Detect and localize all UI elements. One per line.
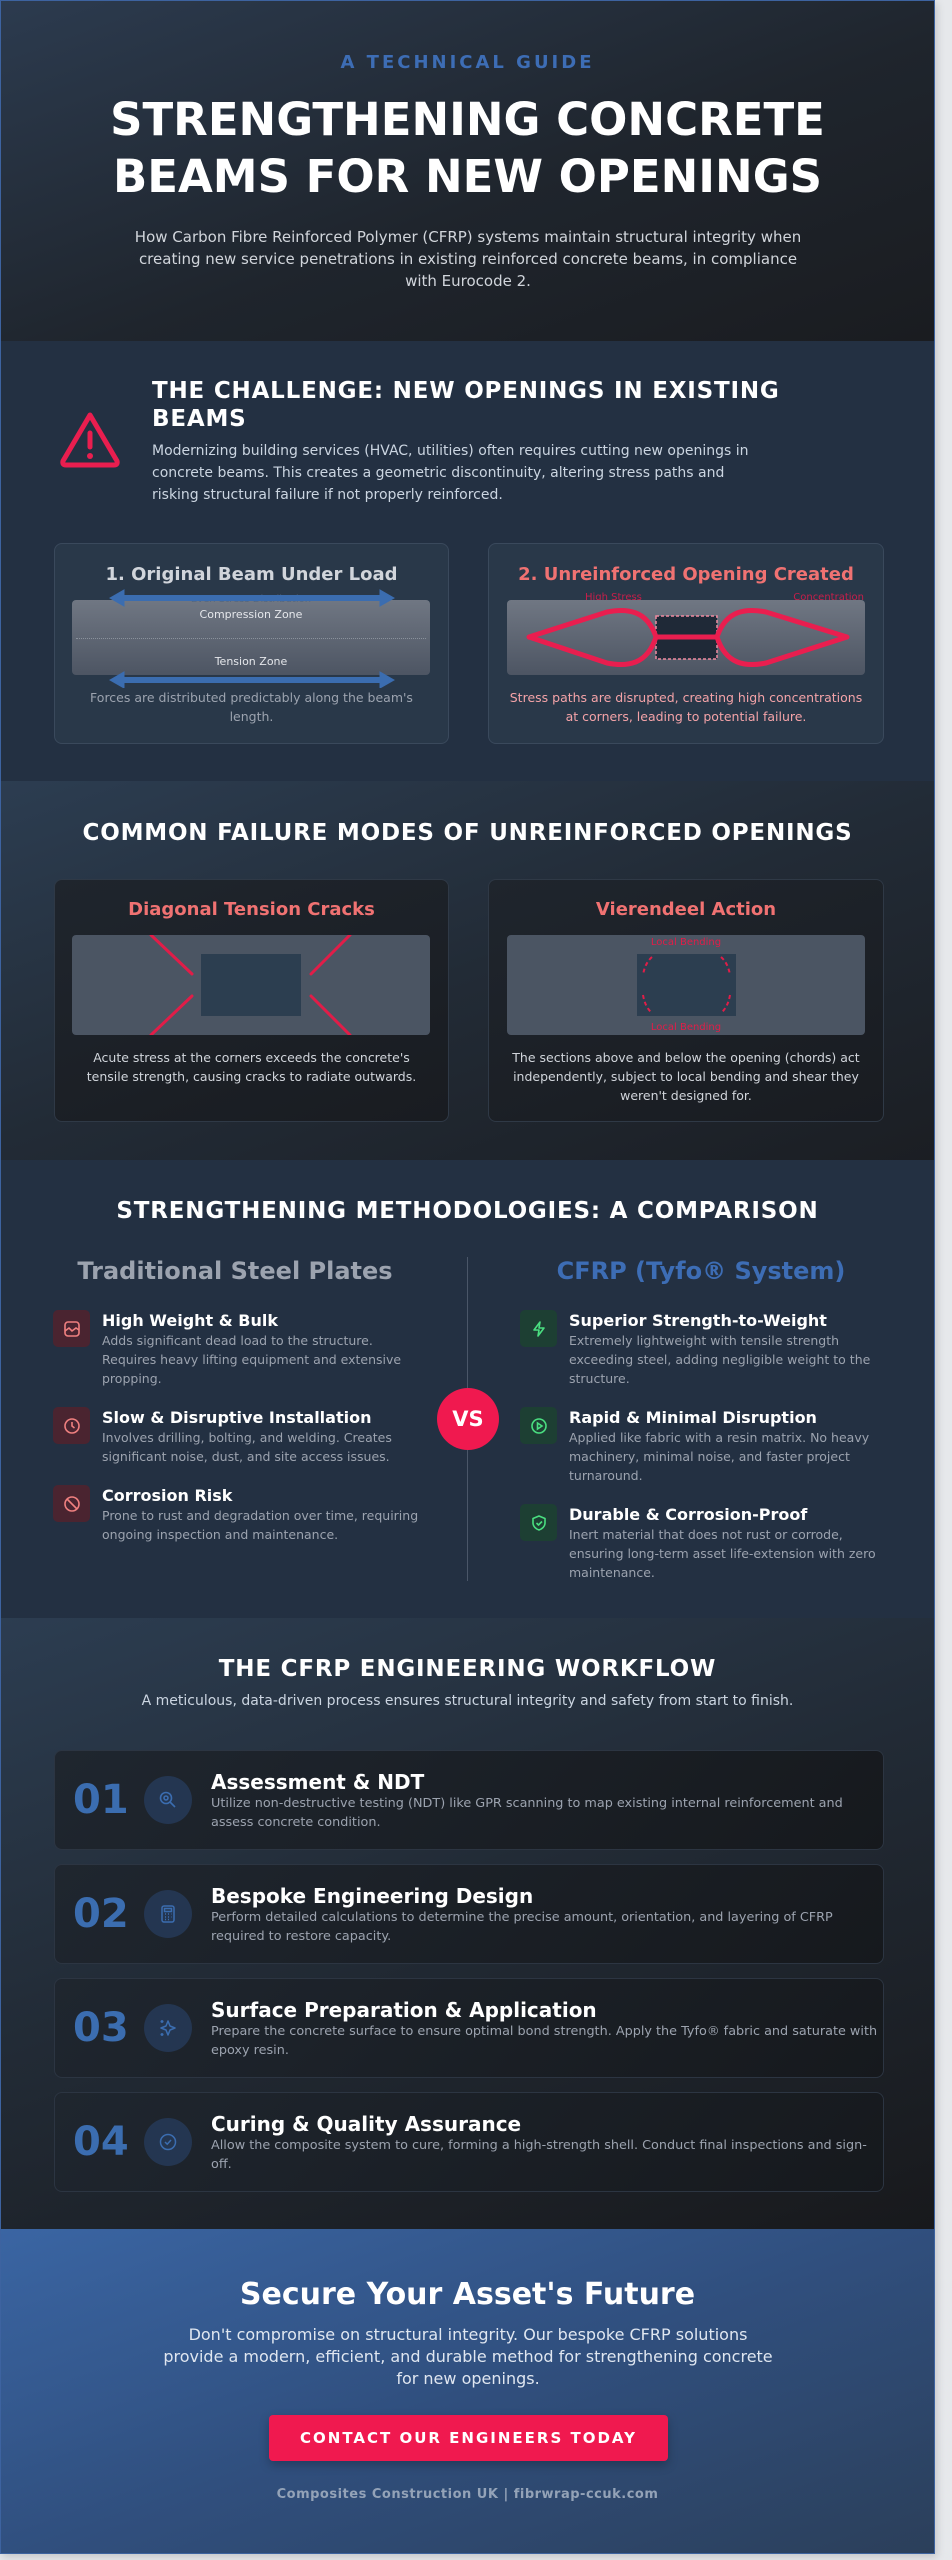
item: corrosion risk: Corrosion Risk bbox=[102, 1486, 232, 1505]
workflow subtitle: A meticulous, data-driven process ensures structural integrity and safety from start to finish. bbox=[142, 1693, 793, 1709]
item: strength to weight bbox=[520, 1310, 870, 1386]
caption: Stress paths are disrupted, creating high concentrations at corners, leading to potential failure. bbox=[510, 690, 862, 724]
tagline: A TECHNICAL GUIDE bbox=[340, 52, 594, 73]
vierendeel diagram: Local Bending bbox=[651, 1022, 721, 1033]
step 01: Utilize non-destructive testing (NDT) like GPR scanning to map existing internal reinforcement and bbox=[211, 1796, 843, 1811]
step 01 bbox=[54, 1750, 884, 1850]
step 04: off. bbox=[211, 2157, 232, 2172]
card: diagonal tension cracks bbox=[54, 879, 449, 1122]
step 04: Allow the composite system to cure, forming a high-strength shell. Conduct final inspections and sign- bbox=[211, 2138, 867, 2153]
item: rapid: Rapid & Minimal Disruption bbox=[569, 1408, 817, 1427]
panel: the challenge bbox=[1, 341, 934, 781]
step 03: Surface Preparation & Application bbox=[211, 1998, 597, 2022]
column title: cfrp: CFRP (Tyfo® System) bbox=[557, 1257, 845, 1285]
beam diagram bbox=[72, 589, 430, 688]
subtitle bbox=[135, 228, 801, 290]
column title: steel: Traditional Steel Plates bbox=[77, 1257, 393, 1285]
icon: bolt bbox=[520, 1310, 557, 1347]
item: strength to weight: Superior Strength-to-Weight bbox=[569, 1311, 827, 1330]
challenge heading: THE CHALLENGE: NEW OPENINGS IN EXISTING BEAMS bbox=[152, 378, 780, 432]
step 04: 04 bbox=[73, 2119, 129, 2165]
card title: 1. Original Beam Under Load bbox=[105, 564, 398, 585]
item: durable: Durable & Corrosion-Proof bbox=[569, 1505, 807, 1524]
icon: vs badge bbox=[437, 1388, 499, 1450]
item: high weight bbox=[53, 1310, 401, 1386]
card: unreinforced opening: Concentration bbox=[793, 592, 864, 603]
icon: weight bbox=[53, 1310, 90, 1347]
icon: ban bbox=[53, 1485, 90, 1522]
step 02: 02 bbox=[73, 1891, 129, 1937]
main title bbox=[110, 93, 825, 203]
workflow heading: THE CFRP ENGINEERING WORKFLOW bbox=[219, 1656, 716, 1682]
item: high weight: High Weight & Bulk bbox=[102, 1311, 278, 1330]
item: durable: Inert material that does not rust or corrode, ensuring long-term asset life-extension with zero maintenance. bbox=[569, 1527, 876, 1580]
item: corrosion risk: Prone to rust and degradation over time, requiring ongoing inspection and maintenance. bbox=[102, 1508, 418, 1542]
step 04: Curing & Quality Assurance bbox=[211, 2112, 521, 2136]
item: strength to weight: Extremely lightweight with tensile strength exceeding steel, adding negligible weight to the structure. bbox=[569, 1333, 870, 1386]
icon: sparkle bbox=[144, 2004, 192, 2052]
cta text: Don't compromise on structural integrity. Our bespoke CFRP solutions provide a modern, efficient, and durable method for strengthening concrete for new openings. bbox=[163, 2325, 773, 2388]
beam with opening diagram bbox=[507, 600, 865, 675]
step 04 bbox=[54, 2092, 884, 2192]
subtitle: How Carbon Fibre Reinforced Polymer (CFRP) systems maintain structural integrity when bbox=[135, 228, 801, 246]
panel: comparison bbox=[1, 1160, 934, 1618]
card title: 2. Unreinforced Opening Created bbox=[518, 564, 854, 585]
card: vierendeel action bbox=[488, 879, 884, 1122]
crack diagram bbox=[72, 935, 430, 1035]
icon: clock bbox=[53, 1407, 90, 1444]
step 02 bbox=[54, 1864, 884, 1964]
subtitle: creating new service penetrations in existing reinforced concrete beams, in compliance bbox=[139, 250, 797, 268]
item: corrosion risk bbox=[53, 1485, 418, 1542]
item: high weight: Adds significant dead load to the structure. Requires heavy lifting equipment and extensive propping. bbox=[102, 1333, 401, 1386]
step 02: Bespoke Engineering Design bbox=[211, 1884, 533, 1908]
card: original beam bbox=[54, 543, 449, 744]
step 03 bbox=[54, 1978, 884, 2078]
step 03: Prepare the concrete surface to ensure optimal bond strength. Apply the Tyfo® fabric and saturate with bbox=[211, 2024, 877, 2039]
cta button: CONTACT OUR ENGINEERS TODAY bbox=[300, 2429, 637, 2447]
icon: shield bbox=[520, 1504, 557, 1541]
icon: search bbox=[144, 1776, 192, 1824]
caption: Forces are distributed predictably along the beam's length. bbox=[90, 690, 413, 724]
icon: play bbox=[520, 1407, 557, 1444]
comparison heading: STRENGTHENING METHODOLOGIES: A COMPARISON bbox=[116, 1198, 819, 1224]
icon: check circle bbox=[144, 2118, 192, 2166]
panel: workflow bbox=[1, 1618, 934, 2229]
step 01: assess concrete condition. bbox=[211, 1815, 381, 1830]
step 03: 03 bbox=[73, 2005, 129, 2051]
icon: calculator bbox=[144, 1890, 192, 1938]
beam diagram: Even Stress Distribution bbox=[191, 594, 311, 605]
beam diagram: Tension Zone bbox=[215, 655, 287, 668]
step 01: Assessment & NDT bbox=[211, 1770, 424, 1794]
challenge text: Modernizing building services (HVAC, utilities) often requires cutting new openings in concrete beams. This creates a geometric discontinuity, altering stress paths and risking structural failure if not properly reinforced. bbox=[152, 443, 749, 503]
cta button bbox=[269, 2415, 668, 2461]
item: slow installation bbox=[53, 1407, 392, 1464]
main title: BEAMS FOR NEW OPENINGS bbox=[113, 150, 822, 203]
main title: STRENGTHENING CONCRETE bbox=[110, 93, 825, 146]
failure heading: COMMON FAILURE MODES OF UNREINFORCED OPENINGS bbox=[83, 820, 852, 846]
panel: failure modes bbox=[1, 781, 934, 1160]
vierendeel diagram bbox=[507, 935, 865, 1035]
subtitle: with Eurocode 2. bbox=[405, 272, 531, 290]
step 02: required to restore capacity. bbox=[211, 1929, 391, 1944]
step 01: 01 bbox=[73, 1777, 129, 1823]
caption: The sections above and below the opening (chords) act independently, subject to local bending and shear they weren't designed for. bbox=[512, 1050, 860, 1103]
header section bbox=[1, 1, 934, 341]
step 02: Perform detailed calculations to determine the precise amount, orientation, and layering of CFRP bbox=[211, 1910, 833, 1925]
item: durable bbox=[520, 1504, 876, 1580]
icon: vs badge: VS bbox=[452, 1407, 484, 1431]
item: rapid: Applied like fabric with a resin matrix. No heavy machinery, minimal noise, and faster project turnaround. bbox=[569, 1430, 869, 1483]
caption: Acute stress at the corners exceeds the concrete's tensile strength, causing cracks to radiate outwards. bbox=[87, 1050, 416, 1084]
step 03: epoxy resin. bbox=[211, 2043, 289, 2058]
beam diagram: Compression Zone bbox=[200, 608, 302, 621]
footer: Composites Construction UK | fibrwrap-ccuk.com bbox=[277, 2487, 658, 2502]
panel: call to action bbox=[1, 2229, 934, 2555]
cta heading: Secure Your Asset's Future bbox=[240, 2277, 695, 2312]
vierendeel diagram: Local Bending bbox=[651, 937, 721, 948]
icon: warning triangle bbox=[60, 412, 120, 468]
item: slow installation: Slow & Disruptive Installation bbox=[102, 1408, 371, 1427]
card title: Diagonal Tension Cracks bbox=[128, 899, 375, 920]
stress labels: High Stress bbox=[585, 592, 642, 603]
card: unreinforced opening bbox=[488, 543, 884, 744]
item: rapid bbox=[520, 1407, 869, 1483]
item: slow installation: Involves drilling, bolting, and welding. Creates significant noise, dust, and site access issues. bbox=[102, 1430, 392, 1464]
card title: Vierendeel Action bbox=[596, 899, 776, 920]
